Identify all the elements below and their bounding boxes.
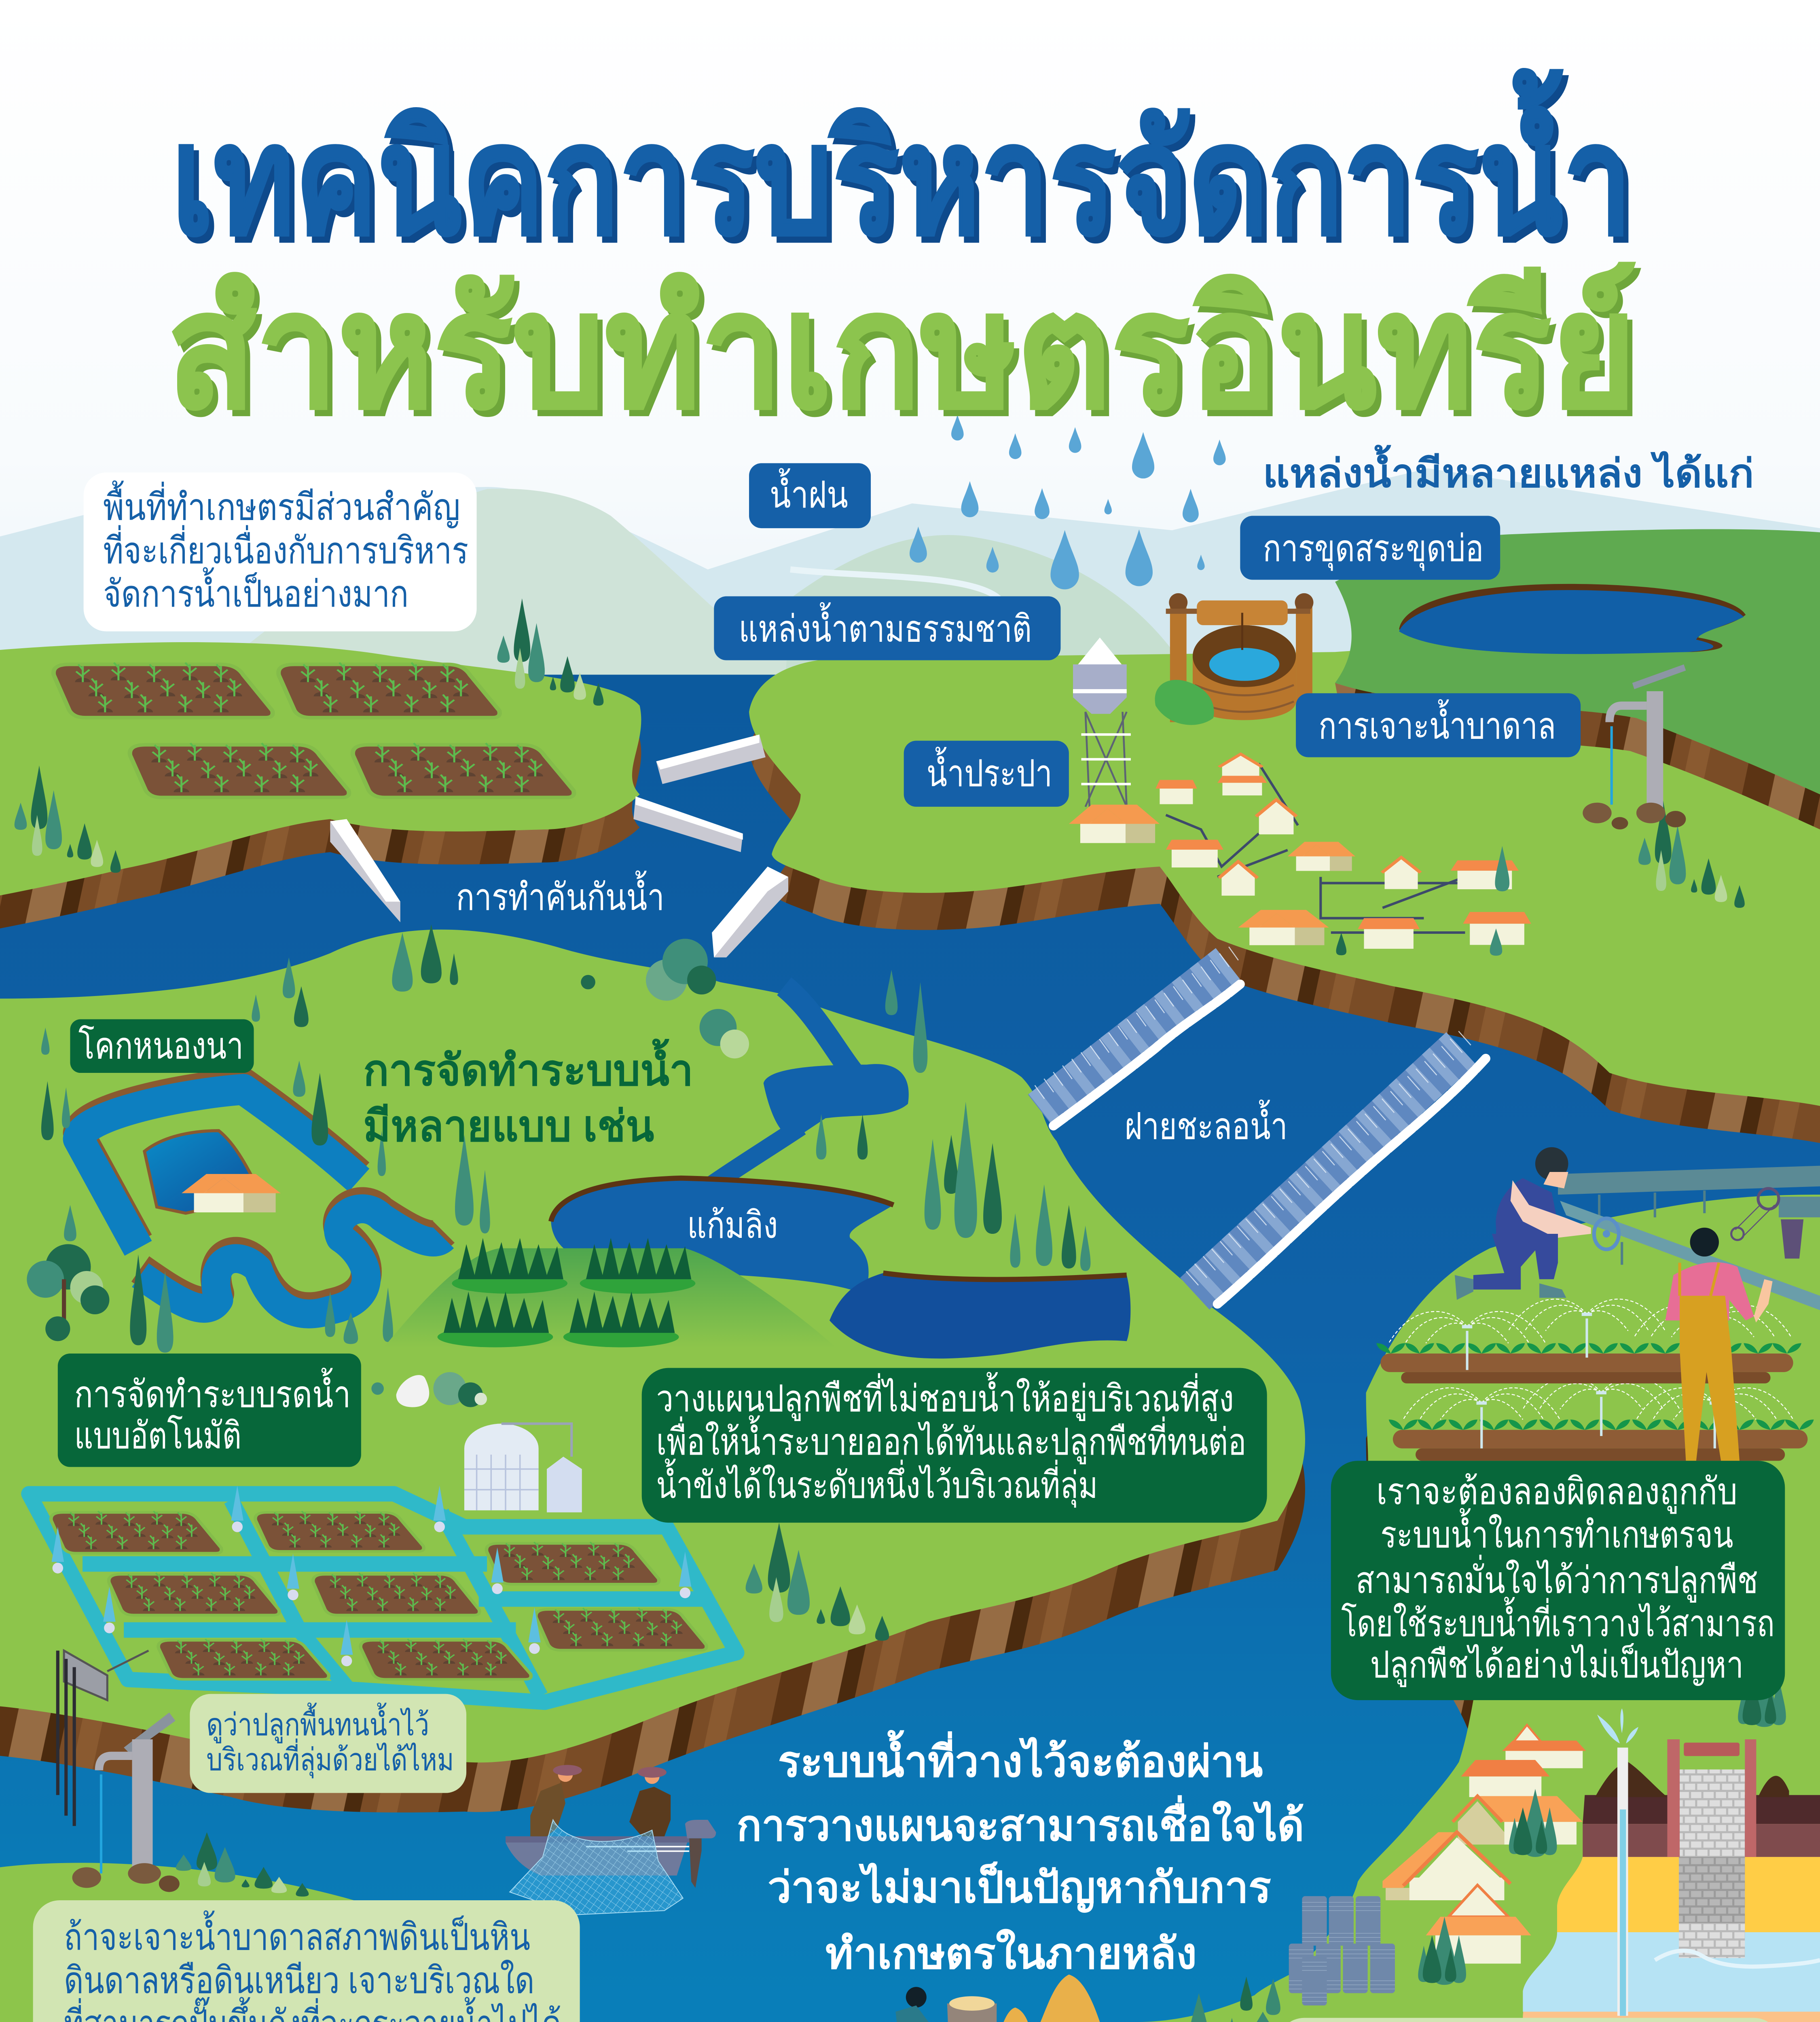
spillways	[1032, 953, 1486, 1304]
land: right side	[1137, 1195, 1820, 2022]
khok nong na canals	[78, 1083, 444, 1314]
central statement: ทำเกษตรในภายหลัง	[825, 1929, 1197, 1978]
label: monkey cheek: แก้มลิง	[687, 1205, 778, 1246]
sprinklers	[52, 1485, 691, 1666]
central statement: ระบบน้ำที่วางไว้จะต้องผ่าน	[778, 1730, 1263, 1786]
label: khok nong na: โคกหนองนา	[78, 1025, 243, 1066]
cliffs of land masses	[0, 656, 1820, 2022]
label: rain	[749, 463, 871, 528]
callout: farm area importance: พื้นที่ทำเกษตรมีส่วนสำคัญ	[103, 480, 460, 529]
callout: crop planning: เพื่อให้น้ำระบายออกได้ทันและปลูกพืชที่ทนต่อ	[656, 1415, 1246, 1464]
central statement: ว่าจะไม่มาเป็นปัญหากับการ	[768, 1861, 1271, 1913]
label: dug pond	[1240, 516, 1500, 580]
farm plots top left	[53, 662, 574, 797]
water tanks	[464, 1423, 582, 1512]
label: khok nong na	[70, 1019, 254, 1073]
soil rows	[1380, 1354, 1793, 1372]
village houses and paths	[1069, 753, 1531, 956]
central statement	[736, 1730, 1304, 1978]
sky background	[0, 0, 1820, 825]
woman	[1665, 1228, 1773, 1461]
label: embankment: การทำคันกันน้ำ	[456, 870, 665, 918]
heading: water systems	[363, 1038, 693, 1150]
trees on right shore	[1190, 1977, 1811, 2022]
well	[1155, 593, 1313, 725]
callout: crop planning: วางแผนปลูกพืชที่ไม่ชอบน้ำให้อยู่บริเวณที่สูง	[656, 1372, 1234, 1421]
callout: drilling: ดินดาลหรือดินเหนียว เจาะบริเวณใด	[64, 1960, 534, 2001]
callout: trial and error: ปลูกพืชได้อย่างไม่เป็นปัญหา	[1370, 1643, 1744, 1687]
boulders	[371, 1372, 487, 1407]
callout: farm area importance	[84, 472, 477, 631]
water tower	[1073, 638, 1131, 807]
pump near fishermen	[58, 1651, 180, 1892]
trees around khok nong na	[27, 1028, 490, 1353]
kneeling man	[1455, 1147, 1619, 1300]
callout: farm area importance: จัดการน้ำเป็นอย่างมาก	[103, 567, 408, 615]
trees below tanks	[746, 1523, 889, 1641]
trees by ponds	[816, 970, 1090, 1271]
label: rain: น้ำฝน	[770, 468, 848, 516]
trees left	[15, 766, 121, 873]
callout: trial and error	[1331, 1461, 1785, 1700]
trees on central land top	[252, 924, 749, 1058]
callout: crop planning	[642, 1368, 1267, 1523]
callout: village land	[1277, 2018, 1781, 2022]
label: automatic watering	[58, 1354, 361, 1467]
monkey cheek ponds and stream	[551, 986, 1130, 1358]
central statement: การวางแผนจะสามารถเชื่อใจได้	[736, 1795, 1304, 1850]
trees by pump	[176, 1832, 309, 1897]
callout: flood tolerant: บริเวณที่ลุ่มด้วยได้ไหม	[206, 1739, 454, 1779]
label: natural source	[714, 596, 1060, 660]
callout: drilling: ถ้าจะเจาะน้ำบาดาลสภาพดินเป็นหิน	[64, 1910, 530, 1958]
barrels	[1289, 1896, 1395, 2005]
title: สำหรับทำเกษตรอินทรีย์	[172, 267, 1642, 447]
farmer, sacks and hay	[895, 1975, 1145, 2022]
label: groundwater	[1296, 693, 1581, 757]
label: groundwater: การเจาะน้ำบาดาล	[1318, 699, 1556, 747]
village by the well	[1382, 1725, 1586, 1985]
callout: trial and error: เราจะต้องลองผิดลองถูกกับ	[1376, 1471, 1737, 1514]
trees top right by the card	[1738, 1659, 1786, 1727]
land: bottom left	[0, 1863, 1249, 2022]
title: สำหรับทำเกษตรอินทรีย์	[167, 260, 1636, 441]
land: village	[749, 619, 1820, 1106]
heading: water sources: แหล่งน้ำมีหลายแหล่ง ได้แก่	[1263, 444, 1754, 495]
fishermen and boat	[506, 1765, 716, 1915]
label: natural source: แหล่งน้ำตามธรรมชาติ	[739, 602, 1032, 650]
farm house	[182, 1174, 281, 1212]
callout: flood tolerant: ดูว่าปลูกพื้นทนน้ำไว้	[206, 1703, 429, 1743]
label: automatic watering: แบบอัตโนมัติ	[74, 1415, 241, 1457]
automatic irrigation canals	[29, 1494, 736, 1702]
title	[167, 68, 1642, 447]
dark green hill with pond	[1335, 529, 1820, 829]
heading: water systems: การจัดทำระบบน้ำ	[363, 1038, 693, 1095]
underground strata and well	[1523, 1708, 1820, 2022]
callout: trial and error: ระบบน้ำในการทำเกษตรจน	[1380, 1508, 1733, 1556]
dam walls	[330, 734, 788, 957]
land: central irrigation	[0, 930, 1305, 1763]
label: dug pond: การขุดสระขุดบ่อ	[1263, 528, 1484, 571]
trees right of pump	[1638, 801, 1745, 908]
label: check dam: ฝายชะลอน้ำ	[1125, 1099, 1288, 1147]
rice bed hill	[384, 1238, 836, 1347]
mountains	[0, 468, 1820, 702]
callout: flood tolerant	[190, 1694, 466, 1793]
label: tap water: น้ำประปา	[927, 747, 1052, 794]
callout: drilling	[33, 1900, 580, 2022]
irrigation plots	[51, 1511, 707, 1679]
land: farm top left	[0, 642, 641, 895]
trees top left	[497, 599, 603, 706]
farmers with pipes and sprinklers	[1376, 1147, 1820, 1461]
label: tap water	[904, 741, 1069, 807]
river water	[0, 675, 1820, 2022]
callout: farm area importance: ที่จะเกี่ยวเนื่องกับการบริหาร	[103, 525, 468, 571]
rain drops	[910, 415, 1226, 589]
sprinkler arcs	[1389, 1311, 1545, 1343]
solar pump	[1583, 664, 1686, 829]
heading: water systems: มีหลายแบบ เช่น	[363, 1102, 654, 1150]
label: automatic watering: การจัดทำระบบรดน้ำ	[74, 1368, 351, 1415]
callout: crop planning: น้ำขังได้ในระดับหนึ่งไว้บริเวณที่ลุ่ม	[656, 1458, 1098, 1508]
